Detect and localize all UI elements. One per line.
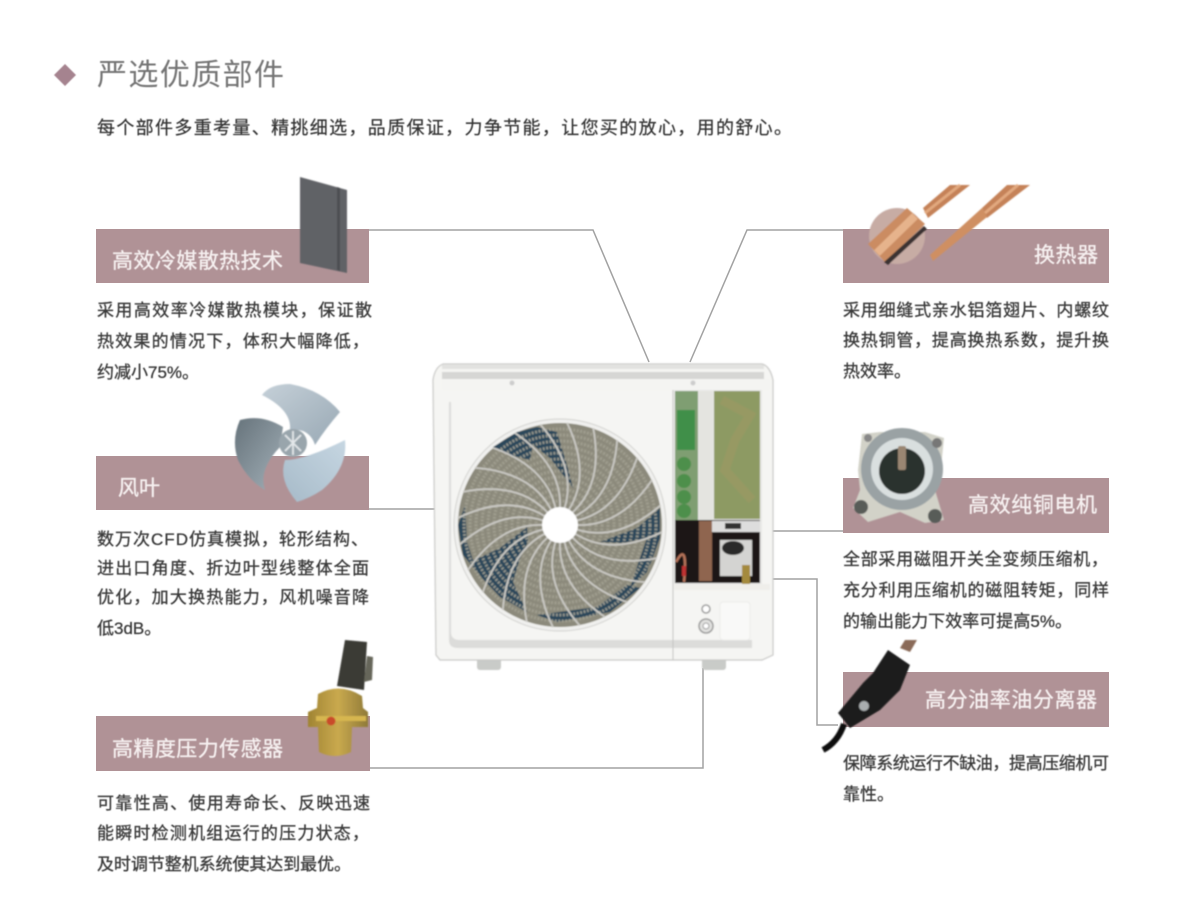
description [843, 301, 1109, 381]
outdoor unit illustration [433, 364, 773, 670]
description: 及时调节整机系统使其达到最优。 [97, 854, 351, 874]
icon: copper pipes [868, 185, 1030, 265]
panel: heat exchanger [843, 185, 1109, 381]
description: 全部采用磁阻开关全变频压缩机， [843, 550, 1108, 569]
heading: 高分油率油分离器 [925, 689, 1097, 712]
description: 约减小75%。 [97, 363, 199, 382]
electrical compartment [674, 390, 770, 590]
description: 热效果的情况下，体积大幅降低， [97, 332, 369, 351]
subtitle: 每个部件多重考量、精挑细选，品质保证，力争节能，让您买的放心，用的舒心。 [97, 118, 792, 138]
connector lines [369, 230, 845, 768]
heading bar [96, 229, 369, 283]
icon: fan blade [235, 384, 345, 502]
description: 保障系统运行不缺油，提高压缩机可 [843, 754, 1109, 773]
icon: motor [853, 428, 944, 523]
description [97, 530, 369, 638]
heading: 风叶 [118, 477, 160, 500]
description: 采用细缝式亲水铝箔翅片、内螺纹 [843, 301, 1109, 320]
description: 采用高效率冷媒散热模块，保证散 [97, 301, 372, 320]
description [843, 754, 1109, 804]
description [97, 301, 372, 382]
description: 低3dB。 [97, 619, 161, 638]
description: 热效率。 [843, 362, 911, 381]
heading: 高精度压力传感器 [112, 738, 283, 761]
heading: 高效纯铜电机 [968, 494, 1097, 517]
title: 严选优质部件 [97, 59, 284, 92]
heading bar [843, 672, 1109, 727]
heading: 换热器 [1034, 244, 1098, 267]
heading bar [96, 716, 370, 771]
panel: pressure sensor [96, 640, 373, 874]
description: 的输出能力下效率可提高5%。 [843, 612, 1072, 631]
icon: pressure sensor [308, 640, 373, 756]
heading bar [843, 478, 1109, 533]
description: 换热铜管，提高换热系数，提升换 [843, 331, 1109, 350]
panel: refrigerant cooling [96, 177, 372, 382]
heading: 高效冷媒散热技术 [112, 250, 283, 273]
valve ports [699, 602, 750, 640]
icon: oil separator [823, 640, 917, 750]
icon: cooling module [300, 177, 347, 273]
description: 优化，加大换热能力，风机噪音降 [97, 588, 369, 607]
description: 靠性。 [843, 785, 894, 804]
fan grille [454, 419, 666, 631]
heading bar [843, 229, 1109, 283]
description: 进出口角度、折边叶型线整体全面 [97, 559, 369, 578]
panel: fan blade [96, 384, 369, 638]
heading bar [96, 456, 369, 510]
description [843, 550, 1109, 631]
panel: copper motor [843, 428, 1109, 631]
description: 数万次CFD仿真模拟，轮形结构、 [97, 530, 368, 549]
description: 充分利用压缩机的磁阻转矩，同样 [843, 581, 1109, 600]
description: 能瞬时检测机组运行的压力状态， [97, 824, 369, 843]
description: 可靠性高、使用寿命长、反映迅速 [97, 793, 370, 813]
panel: oil separator [823, 640, 1109, 804]
description [97, 793, 370, 874]
